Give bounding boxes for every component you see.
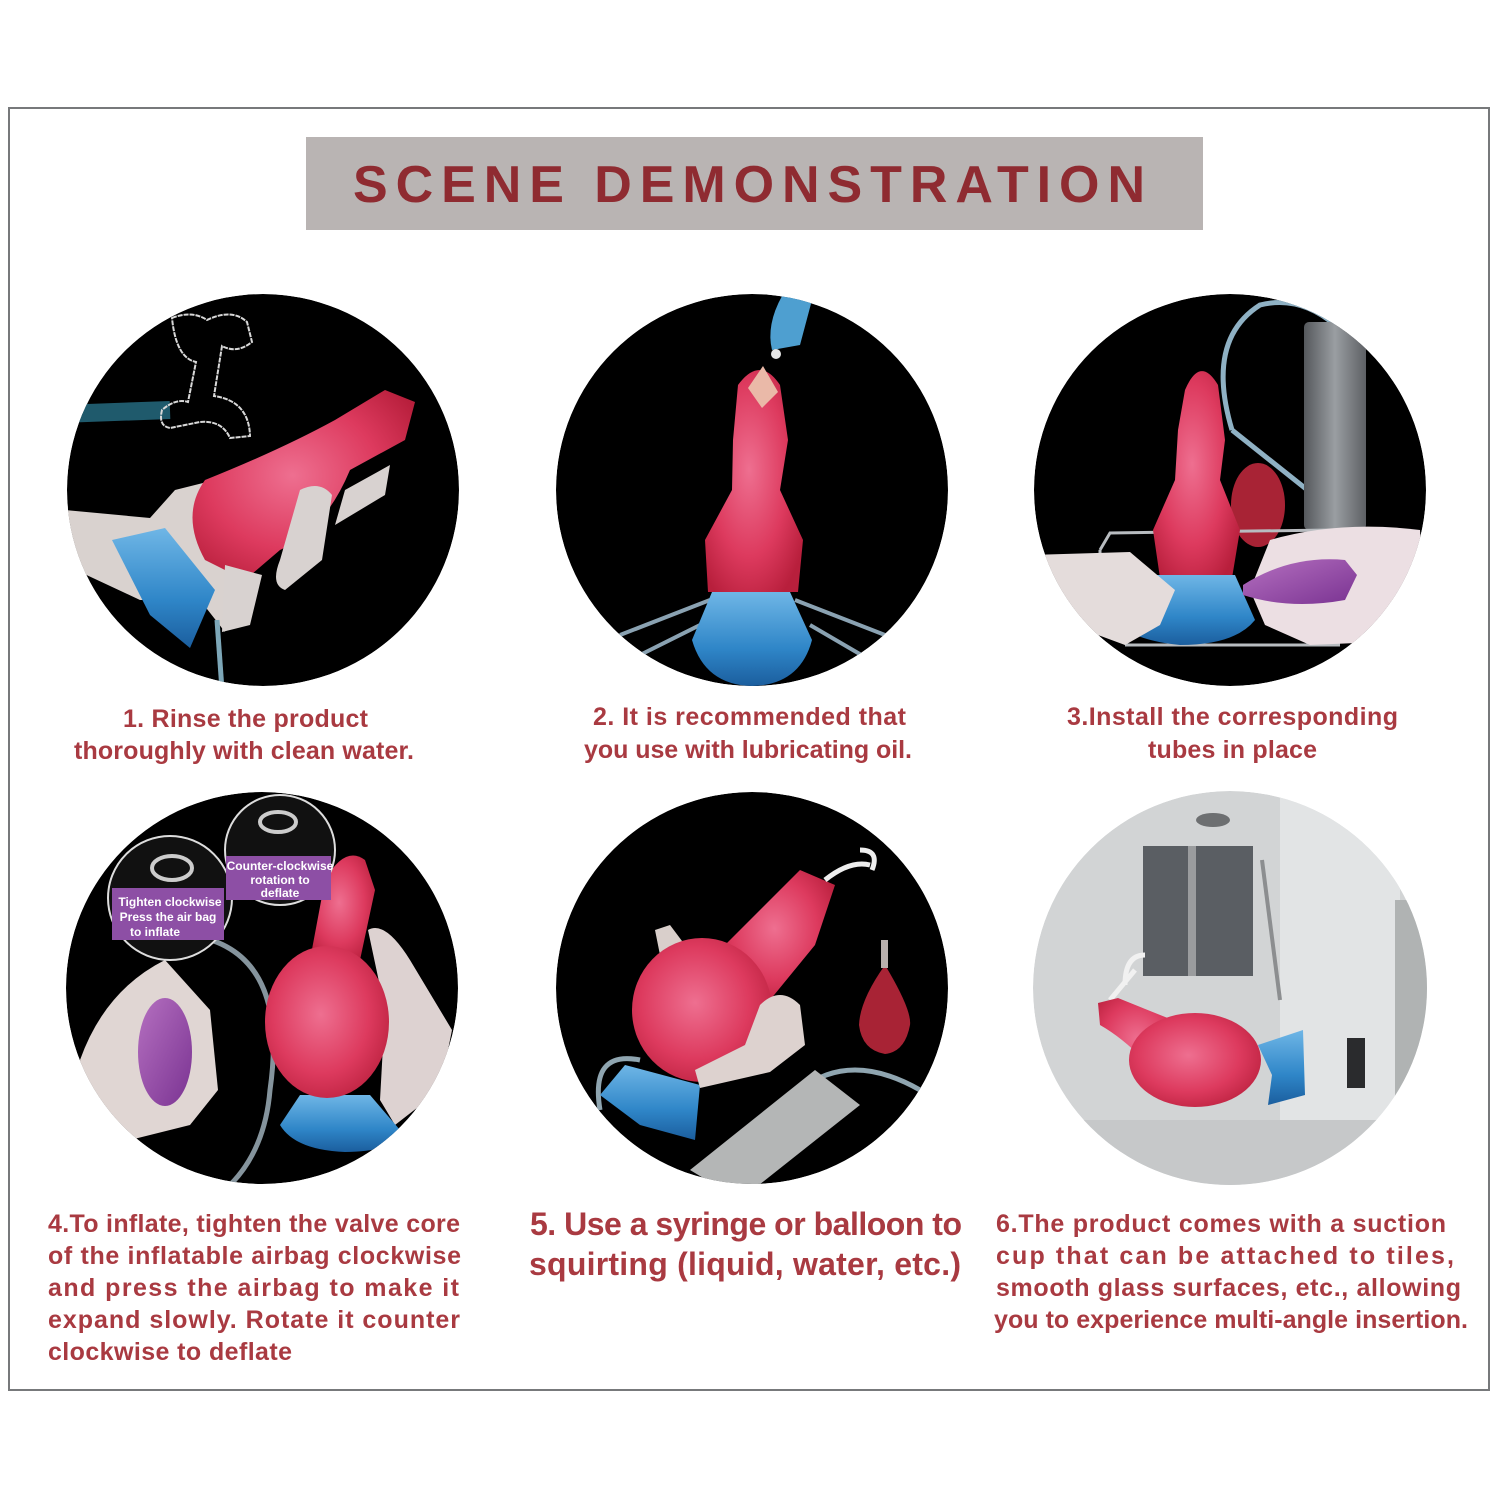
- product body: [1153, 371, 1240, 578]
- caption: step 5: 5. Use a syringe or balloon to: [530, 1206, 962, 1242]
- blue suction base: [280, 1095, 400, 1152]
- red bulb: [1231, 463, 1285, 547]
- caption: step 3: tubes in place: [1148, 736, 1317, 764]
- tube: [214, 940, 276, 1182]
- water hose: [60, 410, 170, 414]
- caption: step 6: you to experience multi-angle insertion.: [994, 1306, 1468, 1334]
- glove fingers: [222, 465, 390, 632]
- caption: step 2: 2. It is recommended that: [593, 703, 907, 731]
- blue suction base: [1140, 575, 1255, 645]
- caption: step 4: 4.To inflate, tighten the valve core: [48, 1210, 460, 1238]
- inset: inflate: Press the air bag: [120, 910, 216, 924]
- caption: step 2: [584, 703, 912, 764]
- caption: step 4: expand slowly. Rotate it counter: [48, 1306, 460, 1334]
- liquid splash: [825, 850, 874, 880]
- caption: step 6: cup that can be attached to tiles,: [996, 1242, 1454, 1270]
- caption: step 5: [529, 1206, 962, 1282]
- lower floor tones: [1035, 1120, 1430, 1190]
- syringe: [1304, 322, 1366, 530]
- title banner: SCENE DEMONSTRATION: [353, 156, 1145, 214]
- fingers behind: [655, 925, 682, 953]
- clear plate: [1100, 530, 1340, 645]
- tube: [598, 1059, 920, 1110]
- lubricant drop: [771, 349, 781, 359]
- inflated product neck: [310, 856, 375, 960]
- inset: deflate: [225, 795, 335, 905]
- blue suction base: [112, 528, 215, 648]
- panel: step 2 lubricate: [556, 294, 948, 686]
- inset: deflate: rotation to: [250, 873, 310, 887]
- shower rail: [1262, 860, 1280, 1000]
- shower head: [1196, 813, 1230, 827]
- product neck: [1098, 998, 1185, 1090]
- dark side wall: [1395, 900, 1430, 1100]
- panel: step 5 squirting: [556, 792, 948, 1200]
- caption: step 6: smooth glass surfaces, etc., allowing: [996, 1274, 1461, 1302]
- product body: [705, 370, 803, 592]
- caption: step 4: [48, 1210, 461, 1366]
- purple airbag: [1243, 559, 1357, 604]
- inflated product sphere: [1129, 1013, 1261, 1107]
- caption: step 3: [1067, 703, 1398, 764]
- panel: step 6 shower wall: [1033, 790, 1430, 1190]
- product neck: [725, 870, 835, 1000]
- right gloved hand: [368, 928, 452, 1125]
- bulb nozzle: [881, 940, 888, 968]
- caption: step 3: 3.Install the corresponding: [1067, 703, 1398, 731]
- caption: step 1: [74, 705, 414, 765]
- caption: step 4: clockwise to deflate: [48, 1338, 292, 1366]
- product body: [192, 390, 415, 580]
- inflated product sphere: [265, 946, 389, 1098]
- panel: step 4 inflate: [66, 792, 458, 1185]
- blue suction base: [1258, 1030, 1305, 1105]
- purple airbag: [138, 998, 192, 1106]
- title banner: [306, 137, 1203, 230]
- icon: water tap outline: [161, 314, 252, 438]
- product tip highlight: [748, 366, 778, 408]
- inset: inflate: [108, 836, 232, 960]
- panel: step 3 install tubes: [1030, 294, 1426, 686]
- tube: [217, 620, 222, 690]
- window: [1143, 846, 1253, 976]
- inflated product sphere: [632, 938, 772, 1082]
- wall tap: [1347, 1038, 1365, 1088]
- shower wall: [1280, 790, 1400, 1190]
- caption: step 4: of the inflatable airbag clockwise: [48, 1242, 461, 1270]
- blue suction base: [692, 592, 812, 686]
- inset: inflate: Tighten clockwise: [118, 895, 222, 909]
- caption: step 4: and press the airbag to make it: [48, 1274, 460, 1302]
- caption: step 5: squirting (liquid, water, etc.): [529, 1246, 961, 1282]
- left gloved hand: [1045, 552, 1175, 645]
- caption: step 6: [994, 1210, 1468, 1334]
- gloved hand: [695, 995, 805, 1088]
- panel: step 1 rinse: [60, 294, 459, 690]
- inset: deflate: Counter-clockwise: [227, 859, 334, 873]
- red bulb: [859, 965, 910, 1054]
- caption: step 1: 1. Rinse the product: [123, 705, 369, 733]
- gloved hand: [65, 480, 230, 632]
- liquid splash: [1110, 955, 1145, 1000]
- right gloved hand: [1250, 527, 1425, 645]
- caption: step 6: 6.The product comes with a suction: [996, 1210, 1446, 1238]
- caption: step 1: thoroughly with clean water.: [74, 737, 414, 765]
- syringe: [690, 1070, 860, 1200]
- inset: inflate: to inflate: [130, 925, 180, 939]
- blue suction base: [600, 1065, 700, 1140]
- tube: [1223, 302, 1335, 500]
- caption: step 2: you use with lubricating oil.: [584, 736, 912, 764]
- left gloved hand: [80, 960, 218, 1140]
- lubricant bottle: [770, 296, 812, 350]
- inset: deflate: deflate: [261, 886, 300, 900]
- tubes: [620, 600, 885, 660]
